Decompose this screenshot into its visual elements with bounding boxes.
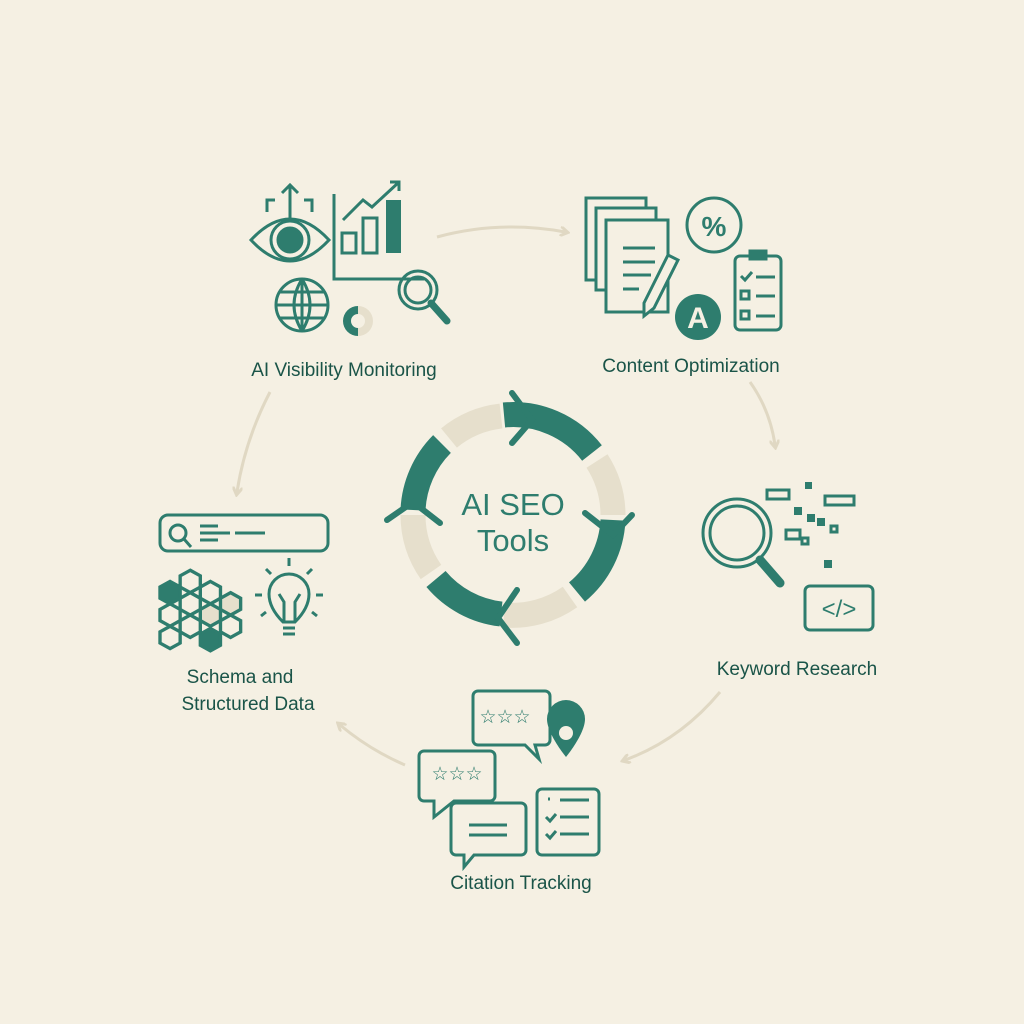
center title: Tools — [477, 523, 549, 558]
icon group: schema and structured data — [160, 515, 328, 651]
label: Schema and Structured Data — [181, 667, 315, 715]
center title — [461, 487, 565, 558]
label: Keyword Research: Keyword Research — [717, 659, 877, 680]
icon group: keyword research — [703, 482, 873, 630]
icon group: AI visibility monitoring — [251, 182, 447, 336]
label: AI Visibility Monitoring: AI Visibility Monitoring — [251, 360, 437, 381]
label: Schema and Structured Data: Schema and — [187, 667, 293, 688]
icon group: citation tracking: ☆☆☆ — [431, 764, 483, 785]
connecting arrows — [237, 227, 775, 765]
icon group: content optimization: A — [687, 302, 709, 335]
icon group: content optimization: % — [702, 211, 727, 242]
center title: AI SEO — [461, 487, 565, 522]
label: Content Optimization: Content Optimization — [602, 356, 780, 377]
center ring — [387, 393, 632, 643]
icon group: citation tracking — [419, 691, 599, 867]
icon group: content optimization — [586, 198, 781, 340]
icon group: keyword research: </> — [822, 596, 856, 623]
label: Citation Tracking: Citation Tracking — [450, 873, 592, 894]
label: Schema and Structured Data: Structured Data — [181, 694, 315, 715]
icon group: citation tracking: ☆☆☆ — [479, 707, 531, 728]
